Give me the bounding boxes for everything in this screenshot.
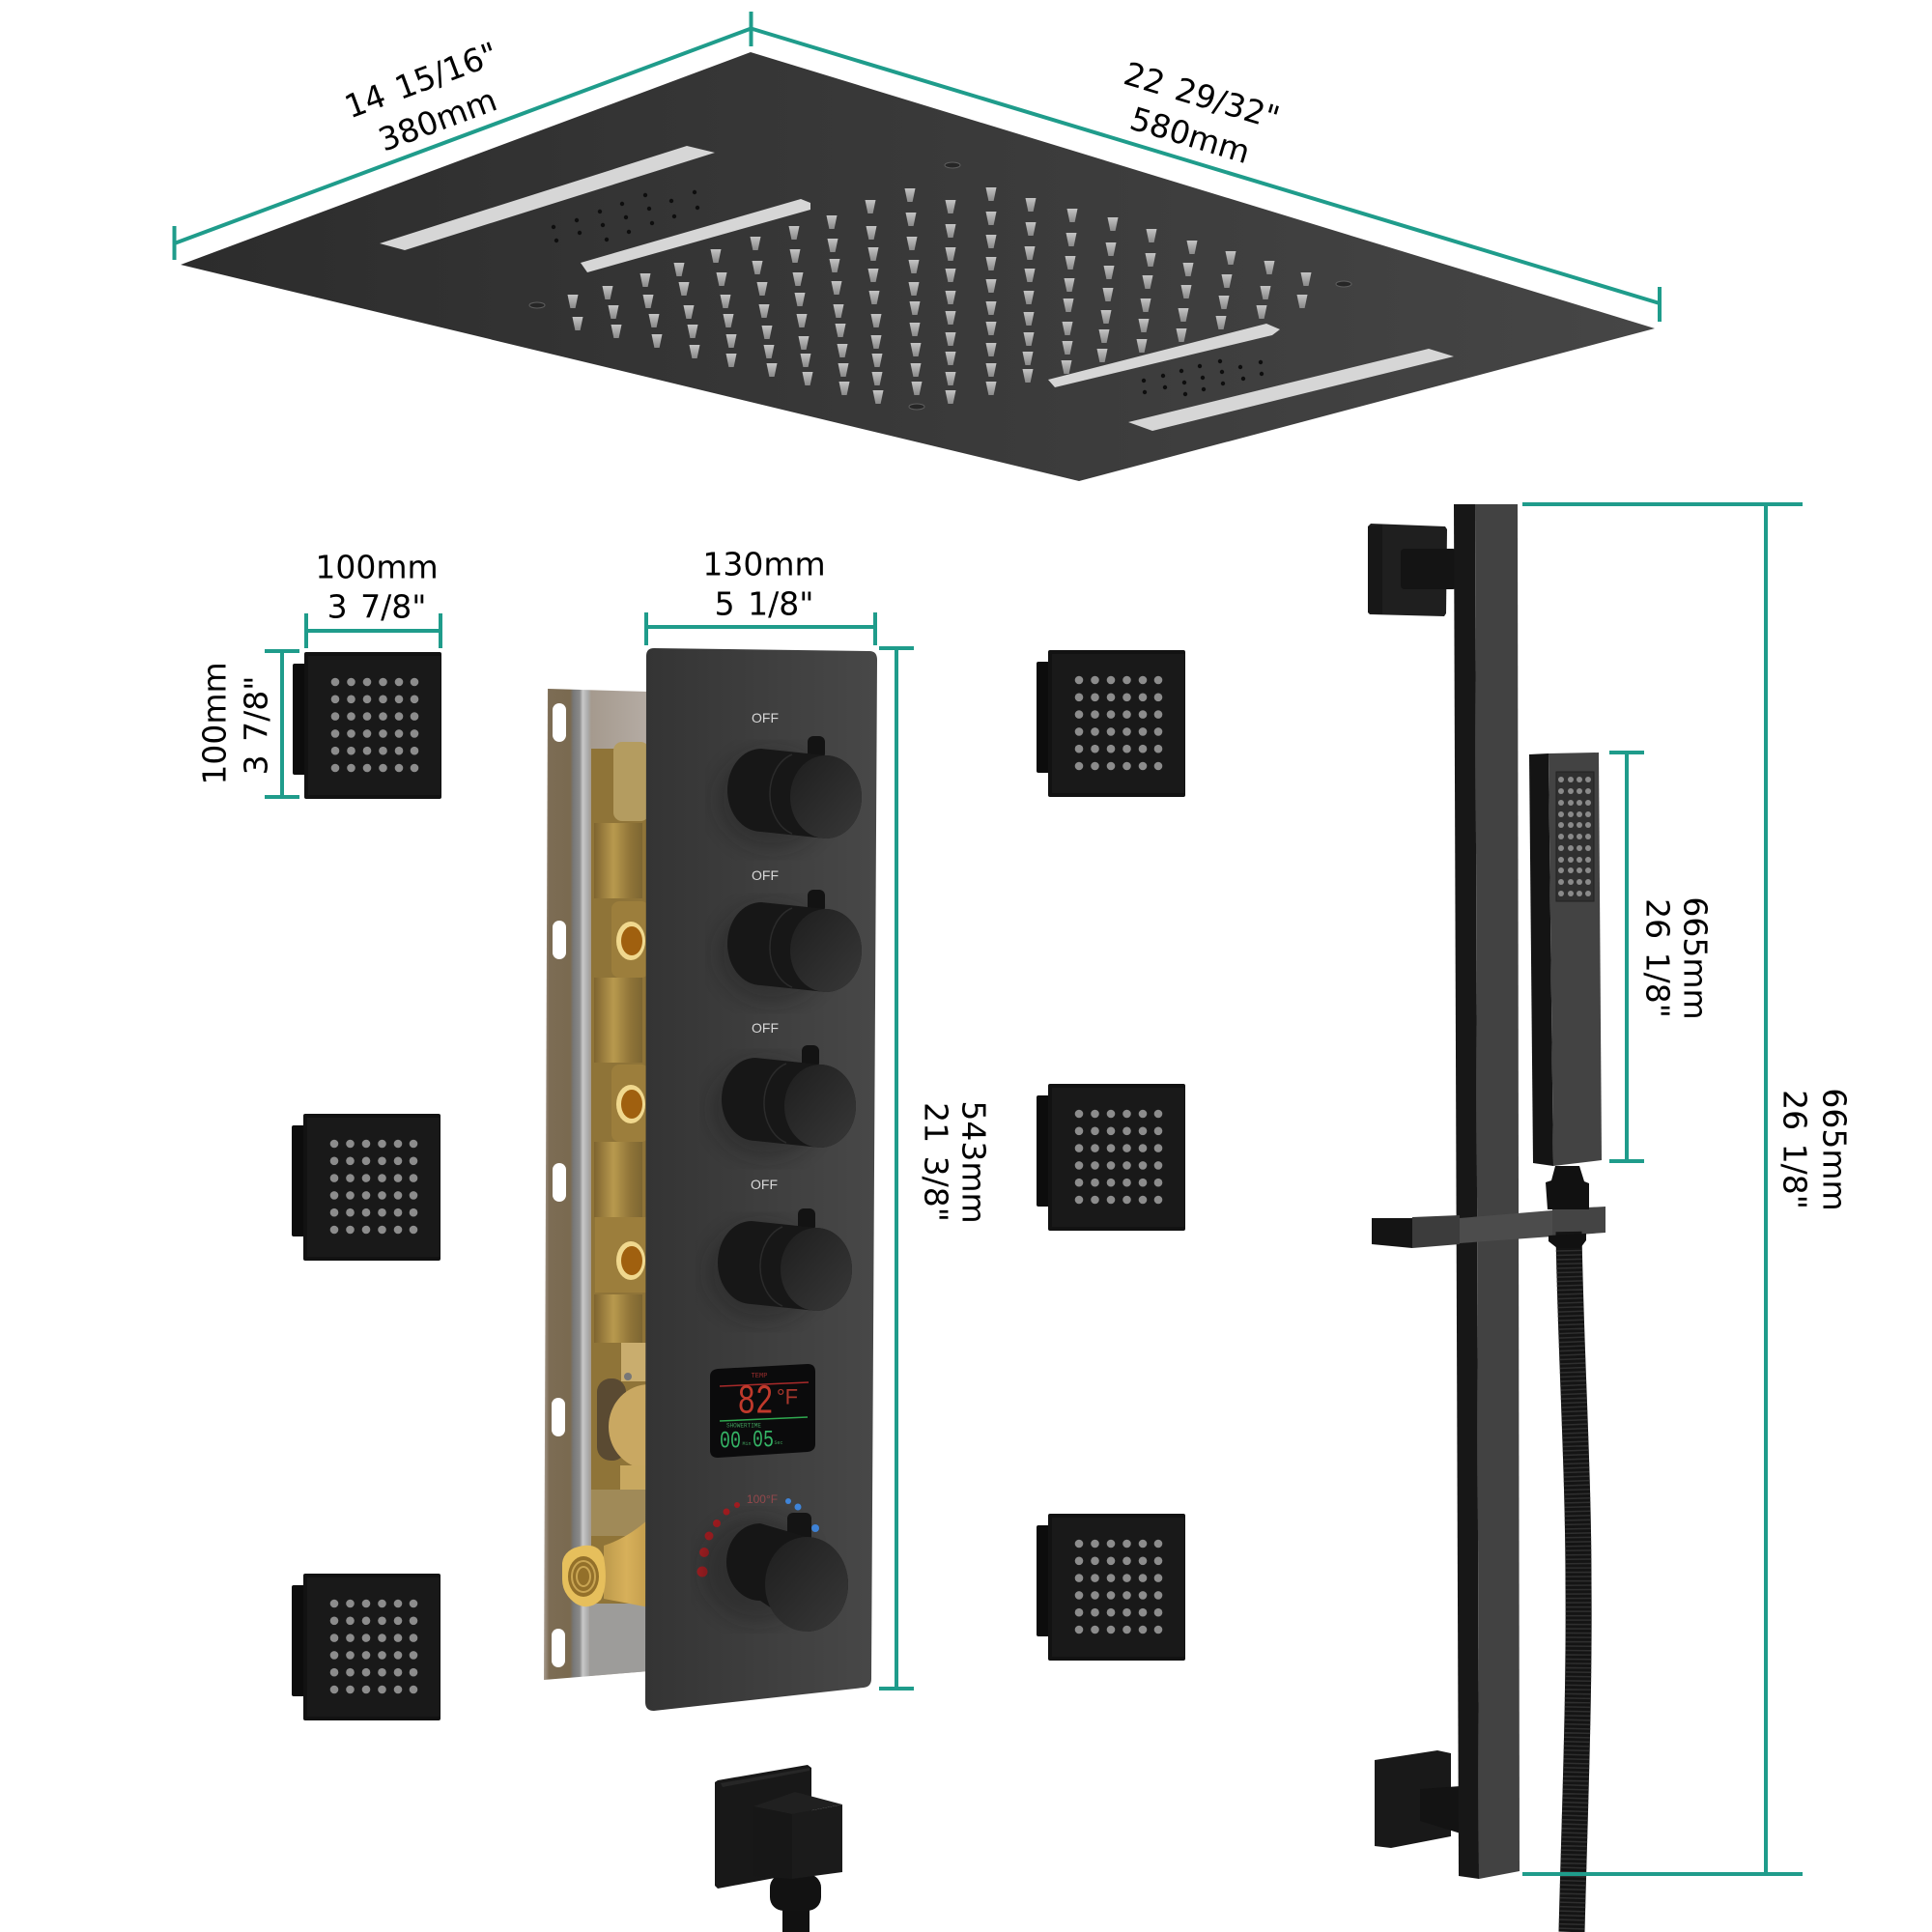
temperature scale label: 100°F: [747, 1492, 778, 1506]
label: 665mm slide bar: 665mm: [1816, 1088, 1853, 1211]
label: 665mm hand shower: 665mm: [1677, 896, 1714, 1020]
label: 14 15/16 inch: 14 15/16": [340, 35, 502, 126]
mounting slots: [552, 703, 566, 1667]
mist holes left: [552, 190, 699, 242]
dimension: valve plate height: [879, 648, 993, 1689]
OFF label 3: OFF: [752, 1020, 779, 1036]
spray face: [1556, 772, 1594, 901]
brass column: [591, 742, 690, 1607]
display min unit: Min: [742, 1441, 752, 1447]
hand shower: [1529, 753, 1602, 1209]
threaded inlet: [562, 1546, 606, 1606]
label: 21 3/8 inch: 21 3/8": [918, 1102, 954, 1222]
display temperature: 82: [738, 1378, 773, 1426]
dimension: jet width: [306, 549, 440, 648]
dimension: slide bar: [1522, 504, 1853, 1874]
bar dark side: [1454, 504, 1479, 1879]
LED strip outer left: [380, 146, 715, 250]
label: 130mm: 130mm: [702, 545, 826, 583]
LED strip inner right: [1048, 324, 1280, 387]
body jet middle right: [1037, 1084, 1185, 1231]
elbow nut: [770, 1874, 821, 1911]
display shower time label: SHOWERTIME: [726, 1422, 761, 1430]
label: 3 7/8 inch: 3 7/8": [327, 587, 426, 626]
body jet middle left: [292, 1114, 440, 1261]
swivel connector: [1546, 1166, 1589, 1209]
mounting screws: [529, 162, 1351, 410]
display temp label: TEMP: [752, 1373, 767, 1380]
top bracket arm: [1401, 549, 1457, 589]
label: 100mm: 100mm: [315, 549, 439, 585]
slider: [1372, 1207, 1605, 1248]
label: 543mm: 543mm: [954, 1100, 993, 1224]
elbow hose: [782, 1903, 810, 1932]
knob 4: [707, 1208, 852, 1322]
steel backplate: [544, 689, 649, 1680]
dimension: panel width: [174, 12, 752, 260]
digital display: [710, 1364, 815, 1458]
wall elbow hose connector: [715, 1765, 842, 1932]
knob 1: [717, 736, 862, 850]
display unit: °F: [777, 1385, 798, 1408]
label: 580mm: 580mm: [1125, 99, 1255, 171]
label: 3 7/8 inch vertical: 3 7/8": [238, 676, 274, 775]
OFF label 1: OFF: [752, 710, 779, 725]
body jet top right: [1037, 650, 1185, 797]
valve faceplate: [645, 648, 877, 1711]
brass back reflection: [591, 749, 649, 1604]
display sec unit: Sec: [774, 1440, 783, 1446]
dimension: jet height: [195, 651, 299, 797]
bottom bracket arm: [1420, 1786, 1461, 1833]
elbow backplate: [715, 1765, 811, 1889]
label: 26 1/8 inch hand shower: 26 1/8": [1638, 898, 1677, 1018]
thermostat knob: [702, 1513, 848, 1632]
LED strip inner left: [581, 199, 810, 272]
label: 5 1/8 inch: 5 1/8": [715, 585, 813, 622]
bar front face: [1475, 504, 1520, 1879]
OFF label 4: OFF: [751, 1177, 778, 1192]
label: 22 29/32 inch: 22 29/32": [1120, 54, 1284, 137]
rough-in valve body: [544, 689, 690, 1680]
rain nozzles: [568, 187, 1312, 404]
LED strip outer right: [1128, 349, 1454, 431]
spray nozzles: [1558, 777, 1591, 896]
rain shower panel: [181, 52, 1655, 481]
blue temperature dots: [785, 1498, 819, 1532]
body jet bottom right: [1037, 1514, 1185, 1661]
body jet bottom left: [292, 1574, 440, 1720]
dimension: panel length: [752, 29, 1660, 322]
label: 100mm vertical: 100mm: [195, 662, 234, 785]
dimension: valve plate width: [646, 545, 875, 645]
display seconds: 05: [753, 1426, 774, 1455]
red temperature dots: [697, 1502, 740, 1577]
bottom wall bracket plate: [1375, 1750, 1451, 1848]
brass ports: [616, 922, 645, 1280]
dimension: hand shower: [1609, 753, 1714, 1161]
display minutes: 00: [720, 1428, 741, 1455]
handle front face: [1548, 753, 1602, 1166]
mist holes right: [1142, 359, 1264, 396]
backplate lower silver section: [589, 1604, 649, 1676]
OFF label 2: OFF: [752, 867, 779, 883]
label: 26 1/8 inch slide bar: 26 1/8": [1776, 1090, 1814, 1209]
body jet top left: [293, 652, 441, 799]
top wall bracket plate: [1368, 524, 1447, 616]
elbow cube: [753, 1792, 842, 1814]
slide bar assembly: [1368, 504, 1605, 1879]
handle dark side: [1529, 753, 1553, 1166]
knob 3: [711, 1045, 856, 1159]
knob 2: [717, 890, 862, 1004]
shower hose: [1548, 1232, 1586, 1932]
label: 380mm: 380mm: [374, 80, 501, 159]
